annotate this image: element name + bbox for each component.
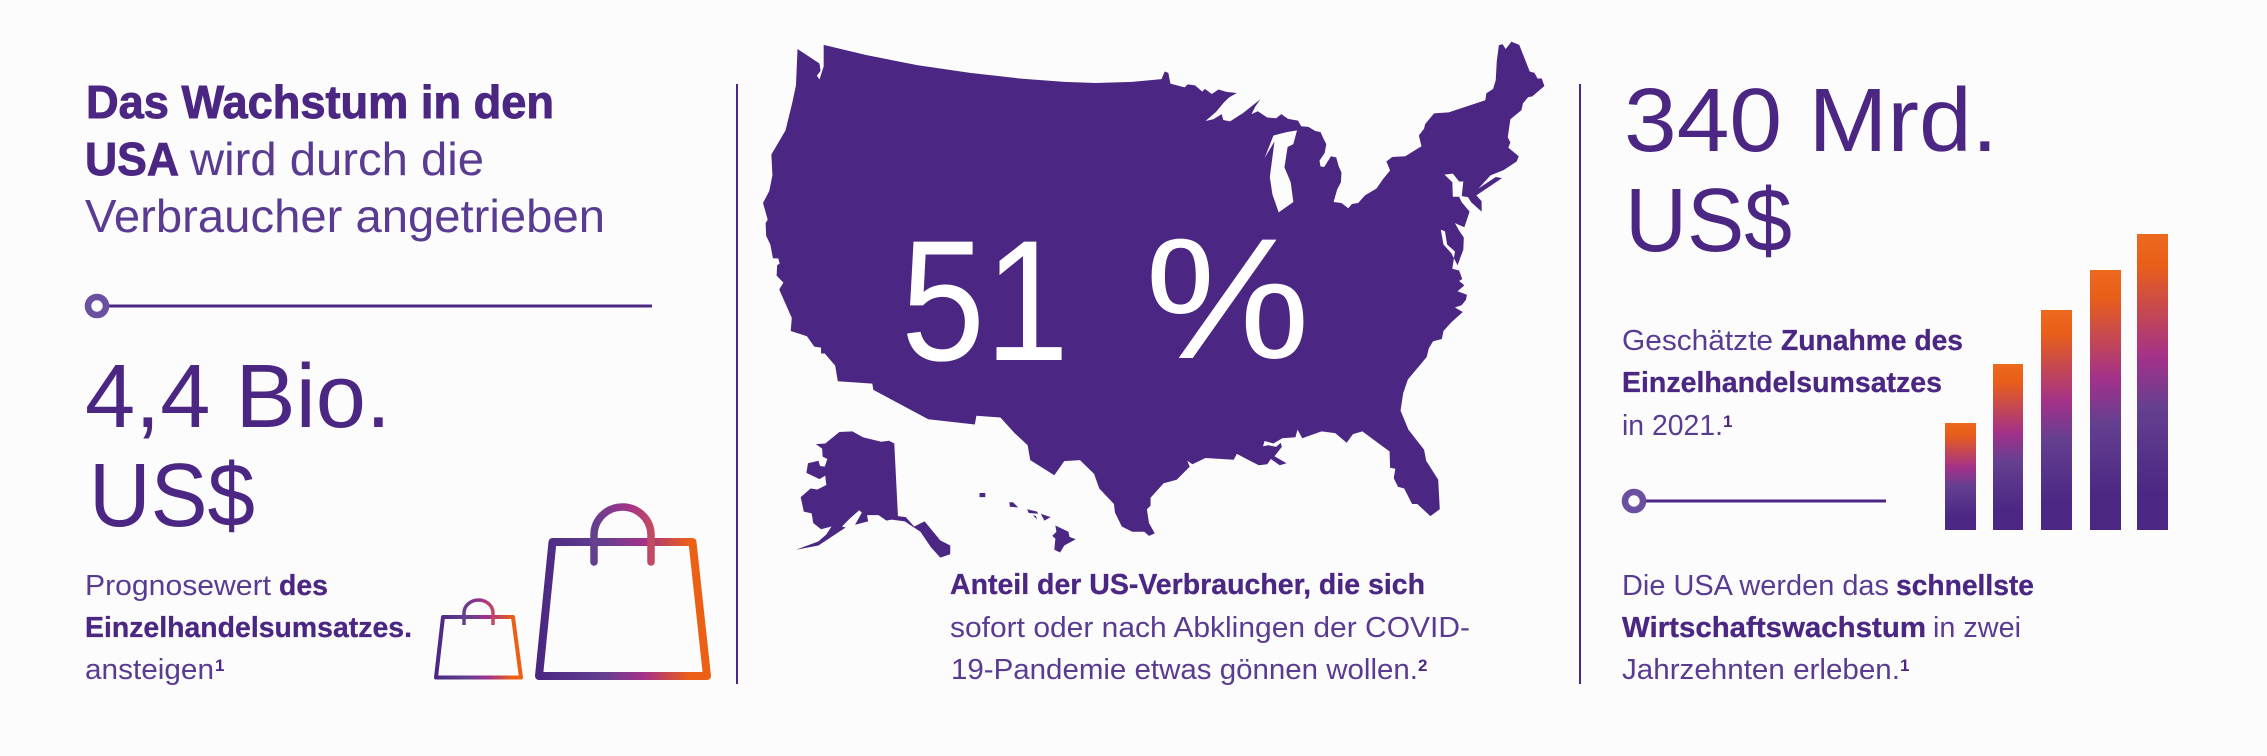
divider: centre and right bbox=[1579, 84, 1581, 684]
big number: 51 %: 51 bbox=[901, 205, 1069, 397]
heading: growth driven by consumers: Das Wachstum in den bbox=[86, 76, 554, 128]
divider with ring marker bbox=[1625, 492, 1886, 510]
divider with ring marker bbox=[88, 297, 652, 315]
text block: fastest growth: Wirtschaftswachstum bbox=[1622, 612, 1926, 644]
map: Hawaii bbox=[980, 493, 1076, 552]
text block: estimated increase: Geschätzte bbox=[1622, 325, 1773, 357]
big number: 51 % bbox=[901, 203, 1310, 397]
big number: 340 Mrd. US$: 340 Mrd. bbox=[1624, 71, 1998, 171]
map: Alaska bbox=[796, 431, 950, 558]
heading: growth driven by consumers: Verbraucher angetrieben bbox=[85, 190, 605, 242]
text block: fastest growth: Die USA werden das bbox=[1622, 570, 1889, 602]
text block: forecast value bbox=[85, 570, 412, 686]
big number: 51 %: % bbox=[1145, 203, 1310, 395]
text block: forecast value: Prognosewert bbox=[85, 570, 271, 602]
text block: estimated increase bbox=[1622, 325, 1963, 442]
map: United States bbox=[763, 42, 1544, 558]
big number: 4,4 Bio. US$ bbox=[85, 347, 391, 546]
big number: 340 Mrd. US$: US$ bbox=[1625, 171, 1792, 271]
text block: consumers share bbox=[950, 569, 1470, 686]
text block: estimated increase: 1 bbox=[1723, 412, 1732, 431]
text block: estimated increase: Zunahme des bbox=[1781, 325, 1963, 357]
text block: consumers share: 19-Pandemie etwas gönnen wollen. bbox=[951, 654, 1418, 686]
text block: estimated increase: in 2021. bbox=[1622, 410, 1723, 442]
big number: 340 Mrd. US$ bbox=[1624, 71, 1998, 271]
divider: left and centre bbox=[736, 84, 738, 684]
text block: fastest growth bbox=[1622, 570, 2034, 686]
icon: small shopping bag bbox=[436, 600, 521, 678]
heading: growth driven by consumers: USA bbox=[85, 133, 179, 185]
text block: estimated increase: Einzelhandelsumsatzes bbox=[1622, 367, 1942, 399]
big number: 4,4 Bio. US$: US$ bbox=[89, 446, 255, 546]
text block: forecast value: Einzelhandelsumsatzes. bbox=[85, 612, 412, 644]
text block: fastest growth: in zwei bbox=[1933, 612, 2021, 644]
heading: growth driven by consumers bbox=[85, 76, 605, 242]
bar chart: retail sales growth bbox=[1945, 234, 2168, 530]
panel: centre column bbox=[763, 42, 1544, 686]
panel: left column bbox=[85, 76, 707, 686]
text block: consumers share: 2 bbox=[1418, 656, 1427, 675]
text block: fastest growth: schnellste bbox=[1896, 570, 2034, 602]
panel: right column bbox=[1622, 71, 2168, 686]
text block: fastest growth: 1 bbox=[1900, 656, 1909, 675]
icon: large shopping bag bbox=[539, 507, 707, 676]
big number: 4,4 Bio. US$: 4,4 Bio. bbox=[85, 347, 391, 447]
text block: forecast value: 1 bbox=[215, 656, 224, 675]
text block: consumers share: sofort oder nach Abklingen der COVID- bbox=[950, 612, 1470, 644]
text block: fastest growth: Jahrzehnten erleben. bbox=[1622, 654, 1900, 686]
text block: consumers share: Anteil der US-Verbraucher, die sich bbox=[950, 569, 1425, 601]
text block: forecast value: des bbox=[279, 570, 328, 602]
text block: forecast value: ansteigen bbox=[85, 654, 214, 686]
heading: growth driven by consumers: wird durch die bbox=[189, 133, 484, 185]
